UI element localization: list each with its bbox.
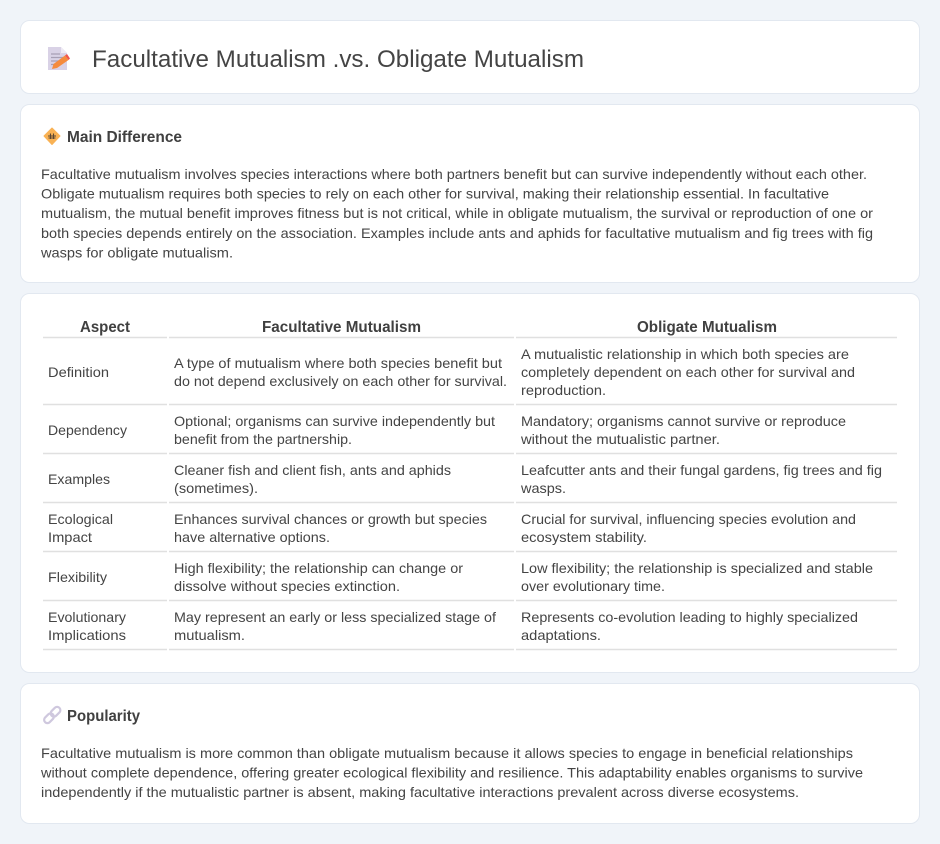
text block: main difference paragraph: both species depends entirely on the association. Examples include ants and aphids for facultative mutualism and fig trees with fig [41, 225, 873, 241]
table row: definition: completely dependent on each other for survival and [521, 364, 855, 380]
table row: evolutionary implications: May represent an early or less specialized stage of [174, 609, 496, 625]
text block: popularity paragraph: without complete dependence, offering greater ecological flexibility and resilience. This adaptability enables organisms to survive [40, 765, 863, 781]
table row: ecological impact: Enhances survival chances or growth but species [174, 511, 487, 527]
table row: ecological impact: Crucial for survival, influencing species evolution and [521, 511, 856, 527]
table row: evolutionary implications: mutualism. [174, 627, 245, 643]
table row: evolutionary implications: Evolutionary [48, 609, 126, 625]
table row: examples: Cleaner fish and client fish, ants and aphids [174, 462, 451, 478]
table row: evolutionary implications [43, 609, 897, 650]
table row: dependency: Mandatory; organisms cannot survive or reproduce [521, 413, 846, 429]
table row: ecological impact: Ecological [48, 511, 113, 527]
icon: chain link [43, 706, 62, 724]
table row: examples: (sometimes). [174, 480, 258, 496]
table row: evolutionary implications: Implications [48, 627, 126, 643]
panel: title header [20, 20, 920, 94]
text block: main difference paragraph [40, 166, 873, 260]
text block: main difference paragraph: mutualism, the mutual benefit improves fitness but is not critical, while in obligate mutualism, the survival or reproduction of one or [41, 205, 873, 221]
table row: dependency [43, 413, 897, 454]
panel: popularity [20, 684, 920, 824]
table row: definition [43, 346, 897, 404]
heading: popularity: Popularity [67, 708, 140, 725]
text block: main difference paragraph: Obligate mutualism requires both species to rely on each other for survival, making their relationship essential. In facultative [41, 186, 829, 202]
table row: evolutionary implications: adaptations. [521, 627, 601, 643]
text block: main difference paragraph: wasps for obligate mutualism. [40, 244, 233, 260]
table row: dependency: without the mutualistic partner. [520, 431, 720, 447]
table header row [43, 319, 897, 338]
icon: orange diamond sign [44, 128, 60, 144]
text block: popularity paragraph: Facultative mutualism is more common than obligate mutualism because it allows species to engage in beneficial relationships [41, 745, 853, 761]
table row: dependency: Dependency [48, 422, 127, 438]
table header row: Facultative Mutualism [262, 319, 421, 336]
table row: examples: Examples [48, 471, 110, 487]
table row: flexibility [43, 560, 897, 600]
table row: examples: wasps. [520, 480, 566, 496]
table row: dependency: benefit from the partnership. [174, 431, 352, 447]
table row: flexibility: dissolve without species extinction. [174, 578, 400, 594]
table header row: Aspect [80, 319, 131, 336]
icon: document with pencil [48, 47, 70, 70]
table row: ecological impact: ecosystem stability. [521, 529, 647, 545]
text block: popularity paragraph: independently if the mutualistic partner is absent, making facultative interactions prevalent across diverse ecosystems. [41, 784, 799, 800]
table row: ecological impact [43, 511, 897, 552]
table row: definition: do not depend exclusively on each other for survival. [174, 373, 507, 389]
panel: comparison table [20, 294, 920, 672]
table row: examples: Leafcutter ants and their fungal gardens, fig trees and fig [521, 462, 882, 478]
table row: ecological impact: Impact [48, 529, 92, 545]
text block: popularity paragraph [40, 745, 863, 800]
text block: main difference paragraph: Facultative mutualism involves species interactions where both partners benefit but can survive independently without each other. [41, 166, 867, 182]
table header row: Obligate Mutualism [637, 319, 777, 336]
title: Facultative Mutualism .vs. Obligate Mutualism [92, 46, 584, 73]
table row: flexibility: Low flexibility; the relationship is specialized and stable [521, 560, 873, 576]
table row: definition: reproduction. [521, 382, 606, 398]
table row: ecological impact: have alternative options. [174, 529, 330, 545]
table row: examples [43, 462, 897, 502]
table row: definition: A type of mutualism where both species benefit but [174, 355, 502, 371]
table row: evolutionary implications: Represents co-evolution leading to highly specialized [521, 609, 858, 625]
table row: flexibility: over evolutionary time. [521, 578, 665, 594]
panel: main difference [20, 104, 920, 282]
table row: flexibility: High flexibility; the relationship can change or [174, 560, 463, 576]
heading: main difference: Main Difference [67, 129, 182, 146]
table row: definition: Definition [48, 364, 109, 380]
table row: definition: A mutualistic relationship in which both species are [521, 346, 849, 362]
table row: flexibility: Flexibility [48, 569, 107, 585]
table row: dependency: Optional; organisms can survive independently but [174, 413, 495, 429]
